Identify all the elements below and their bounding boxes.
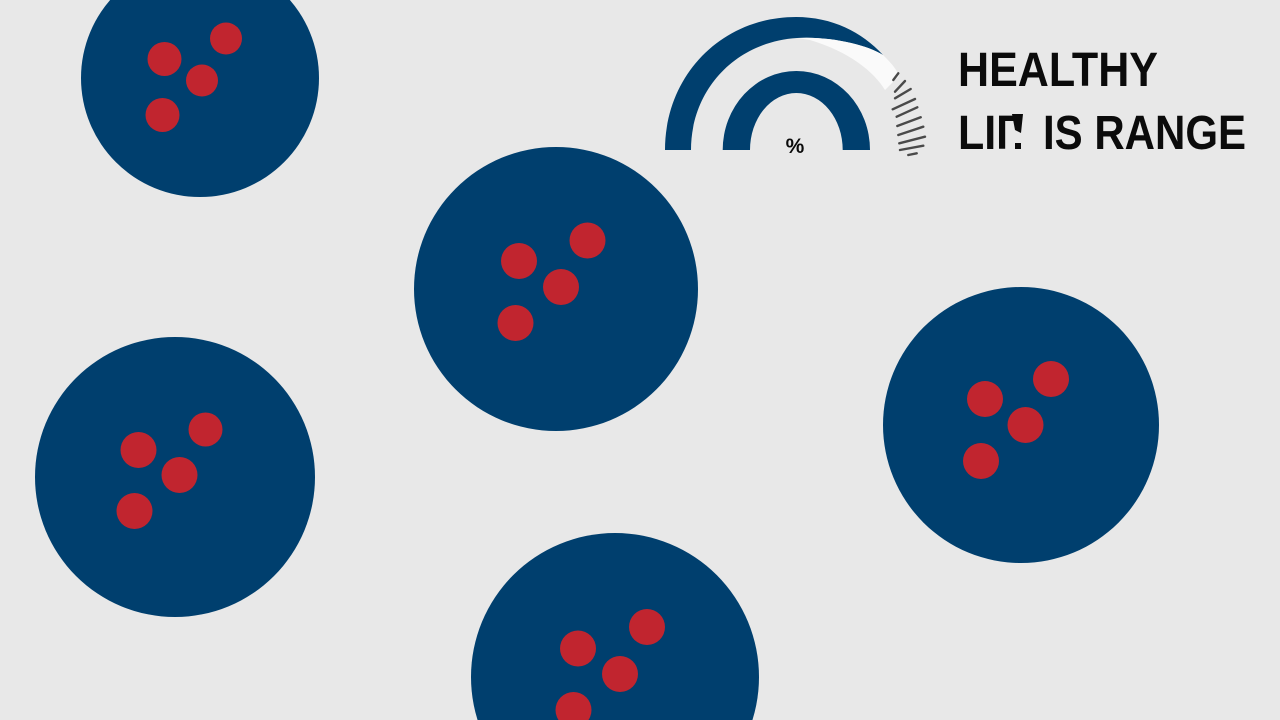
gauge outer arc <box>665 17 883 150</box>
circle 2: centre navy disc with red dots <box>414 147 698 431</box>
gauge: semicircular range indicator <box>665 17 925 158</box>
gauge inner arc <box>723 71 870 150</box>
title line 2 remainder: IS RANGE <box>1043 107 1246 160</box>
title line 2 broken glyph fragment <box>1012 114 1023 149</box>
title line 2 garbled word: LIΓ <box>958 107 1022 160</box>
title line 1: HEALTHY <box>958 44 1158 97</box>
gauge white highlighted segment <box>797 38 899 90</box>
gauge percent sign: % <box>786 135 805 158</box>
circle 5: bottom navy disc with red dots <box>471 533 759 720</box>
circle 4: right navy disc with red dots <box>883 287 1159 563</box>
gauge tick marks <box>893 73 925 155</box>
circle 1: top left navy disc with red dots <box>81 0 319 197</box>
circle 3: lower left navy disc with red dots <box>35 337 315 617</box>
title <box>958 44 1246 160</box>
